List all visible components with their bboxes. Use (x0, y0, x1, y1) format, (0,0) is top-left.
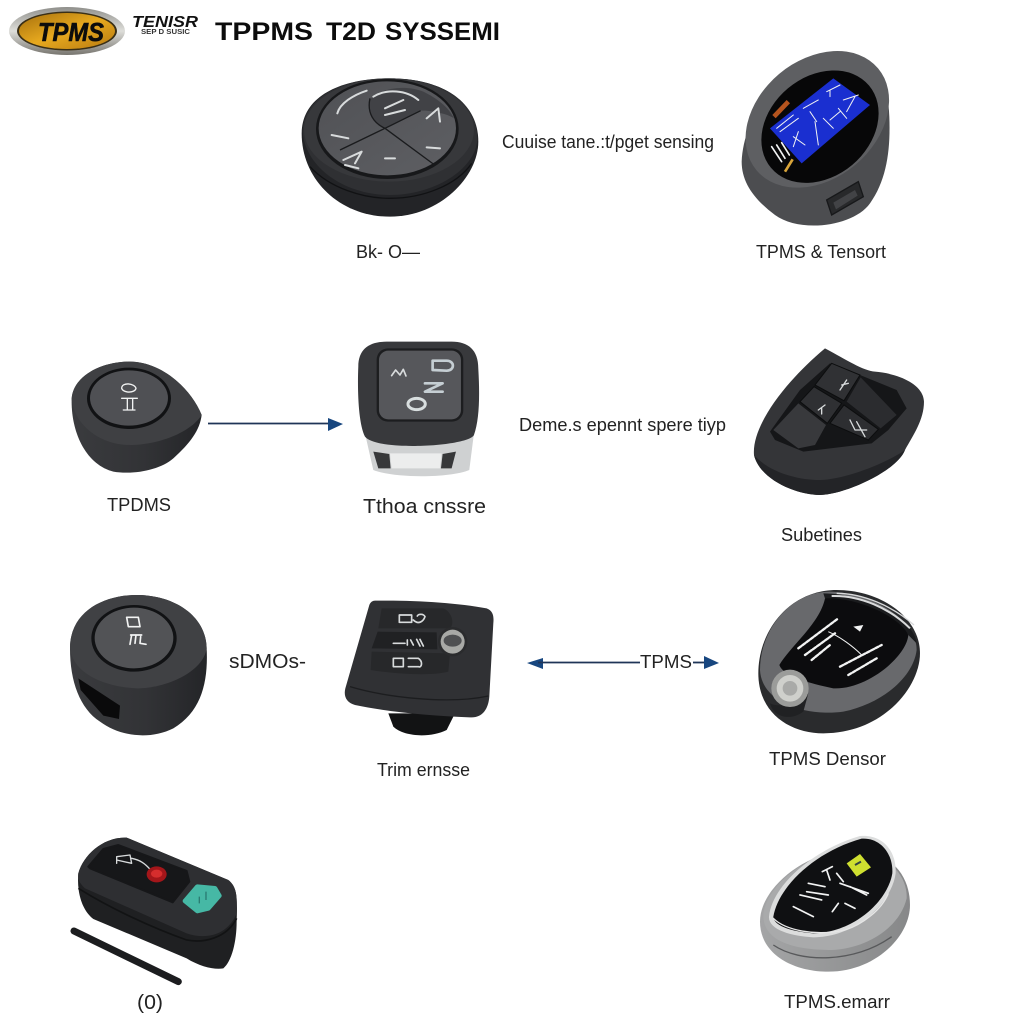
arrow: push button to selector (208, 418, 343, 431)
title: TPPMS (215, 18, 313, 46)
label: third row right device: TPMS Densor (769, 749, 886, 769)
label: second row right device: Subetines (781, 525, 862, 545)
label: second row middle text: Deme.s epennt spere tiyp (519, 415, 726, 435)
device: round push button (72, 362, 202, 473)
label: centre right of first row: Cuuise tane.:t/pget sensing (502, 132, 714, 152)
title: SYSSEMI (385, 18, 500, 46)
label: bottom right device: TPMS.emarr (784, 992, 890, 1012)
device: round four-button switch (302, 78, 478, 217)
label: first row left device: Bk- O— (356, 242, 420, 262)
double arrow with TPMS label (527, 652, 719, 672)
logo: TPMS oval badge (9, 7, 125, 55)
device: black rectangular fob with teal button and cable (74, 838, 237, 982)
device: tilted display unit (718, 23, 916, 226)
logo: TPMS oval badge: TPMS (38, 17, 105, 47)
title: T2D (326, 18, 376, 46)
label: bottom left device: (0) (137, 992, 163, 1014)
brand mark: TENISK: SEP D SUSIC (141, 29, 190, 36)
device: round cylinder button with notch (70, 595, 207, 735)
device: square selector with chrome base (358, 342, 479, 476)
title (215, 18, 500, 46)
label: third row left device: sDMOs- (229, 651, 306, 673)
label: first row right device: TPMS & Tensort (756, 242, 886, 262)
brand mark: TENISK: TENISR (132, 14, 199, 31)
label: third row centre device: Trim ernsse (377, 760, 470, 780)
label: second row left device: TPDMS (107, 495, 171, 515)
device: round sensor with black display (758, 590, 920, 733)
device: rectangular three-button fob (345, 601, 494, 735)
device: shield-shaped key fob (754, 348, 924, 495)
device: grey round sensor with yellow tag (760, 836, 910, 972)
brand mark: TENISK (132, 14, 199, 36)
label: second row centre device: Tthoa cnssre (363, 496, 486, 518)
double arrow with TPMS label: TPMS (640, 652, 692, 672)
